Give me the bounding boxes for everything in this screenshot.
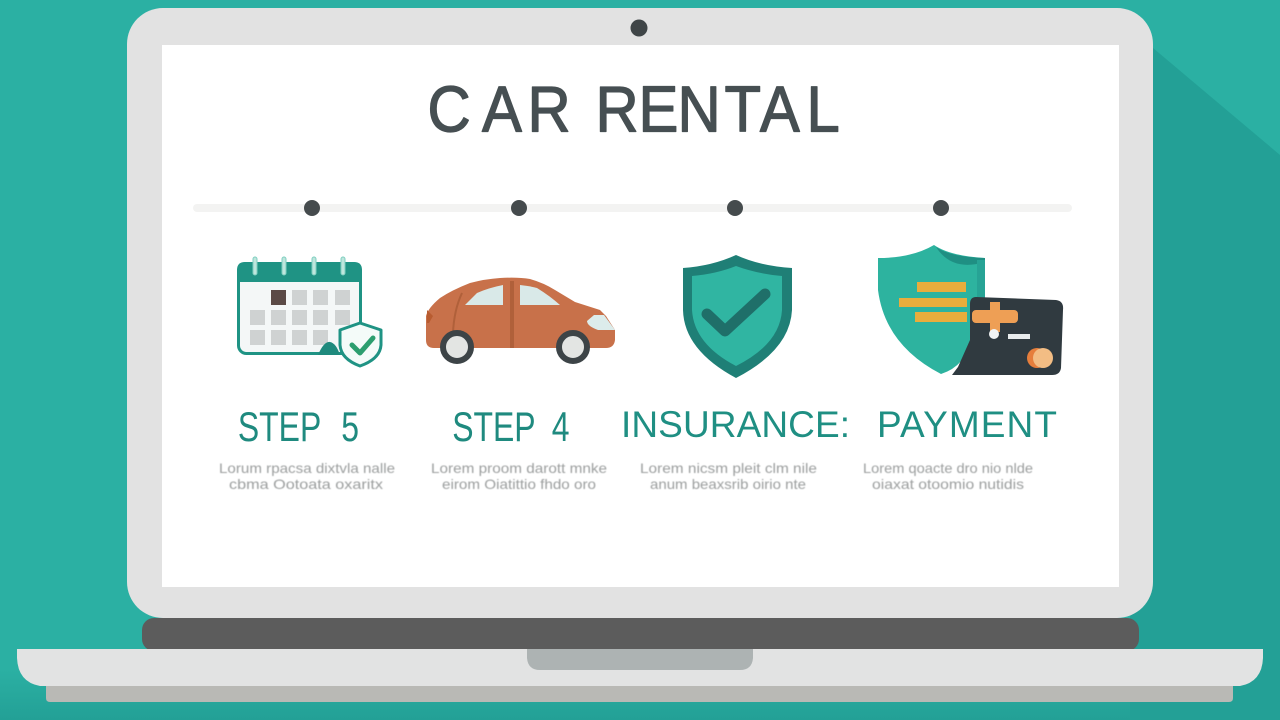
heading: step 4: STEP [452, 403, 544, 450]
rear light [427, 310, 433, 323]
webcam [630, 20, 648, 36]
calendar rings [253, 257, 345, 275]
icon: car [426, 278, 615, 361]
laptop base [17, 649, 1263, 686]
icon: calendar with shield [237, 257, 381, 366]
text block: insurance [640, 460, 817, 492]
screen [162, 45, 1119, 587]
title: CAR RENTAL [428, 73, 840, 146]
base foot [46, 684, 1233, 702]
text block: payment: oiaxat otoomio nutidis [872, 476, 1024, 492]
car body [426, 278, 615, 348]
rear window [465, 285, 503, 305]
rear door line [453, 293, 462, 333]
icon: insurance shield [683, 255, 792, 378]
text block: step 4: eirom Oiatittio fhdo oro [442, 476, 596, 492]
shield outer [683, 255, 792, 378]
heading: step 5: STEP [238, 403, 330, 450]
calendar header [237, 262, 362, 282]
heading: step 5: 5 [341, 403, 359, 450]
text block: step 5: Lorum rpacsa dixtvla nalle [219, 460, 395, 476]
icon: shield and credit card [878, 245, 1063, 375]
text block: insurance: Lorem nicsm pleit clm nile [640, 460, 817, 476]
timeline dot 4 [933, 200, 949, 216]
door line [510, 281, 514, 348]
timeline [193, 200, 1072, 216]
shield shading [936, 247, 985, 265]
timeline dot 2 [511, 200, 527, 216]
calendar day cells [250, 290, 350, 345]
text block: step 5 [219, 460, 395, 492]
timeline track [193, 204, 1072, 212]
shield check mark [707, 294, 765, 331]
timeline dot 3 [727, 200, 743, 216]
laptop lid [127, 8, 1153, 618]
text block: payment [863, 460, 1033, 492]
credit card [952, 297, 1063, 375]
text block: step 4 [431, 460, 607, 492]
timeline dot 1 [304, 200, 320, 216]
highlighted day [271, 290, 286, 305]
headlight [587, 315, 615, 330]
heading: step 4: 4 [552, 403, 570, 450]
shield inner [692, 266, 782, 366]
rear wheel [443, 333, 471, 361]
small shield [340, 323, 381, 366]
card white dot [989, 329, 999, 339]
text block: payment: Lorem qoacte dro nio nlde [863, 460, 1033, 476]
shield side shading [977, 260, 985, 298]
calendar bump [318, 342, 340, 355]
text block: insurance: anum beaxsrib oirio nte [650, 476, 806, 492]
hinge [142, 618, 1139, 651]
laptop shadow [1130, 30, 1280, 720]
heading: payment: PAYMENT [877, 404, 1057, 445]
trackpad notch [527, 649, 753, 670]
card emblem [972, 302, 1018, 332]
card shield [878, 245, 985, 374]
front wheel [559, 333, 587, 361]
front window [520, 285, 560, 305]
calendar frame [238, 264, 360, 354]
card coin [1027, 348, 1053, 368]
floor shading [0, 670, 1280, 720]
text block: step 5: cbma Ootoata oxaritx [229, 476, 383, 492]
card white strip [1008, 334, 1030, 339]
small shield check [352, 338, 373, 353]
orange bars [899, 282, 967, 322]
heading: insurance: INSURANCE: [621, 404, 850, 445]
text block: step 4: Lorem proom darott mnke [431, 460, 607, 476]
